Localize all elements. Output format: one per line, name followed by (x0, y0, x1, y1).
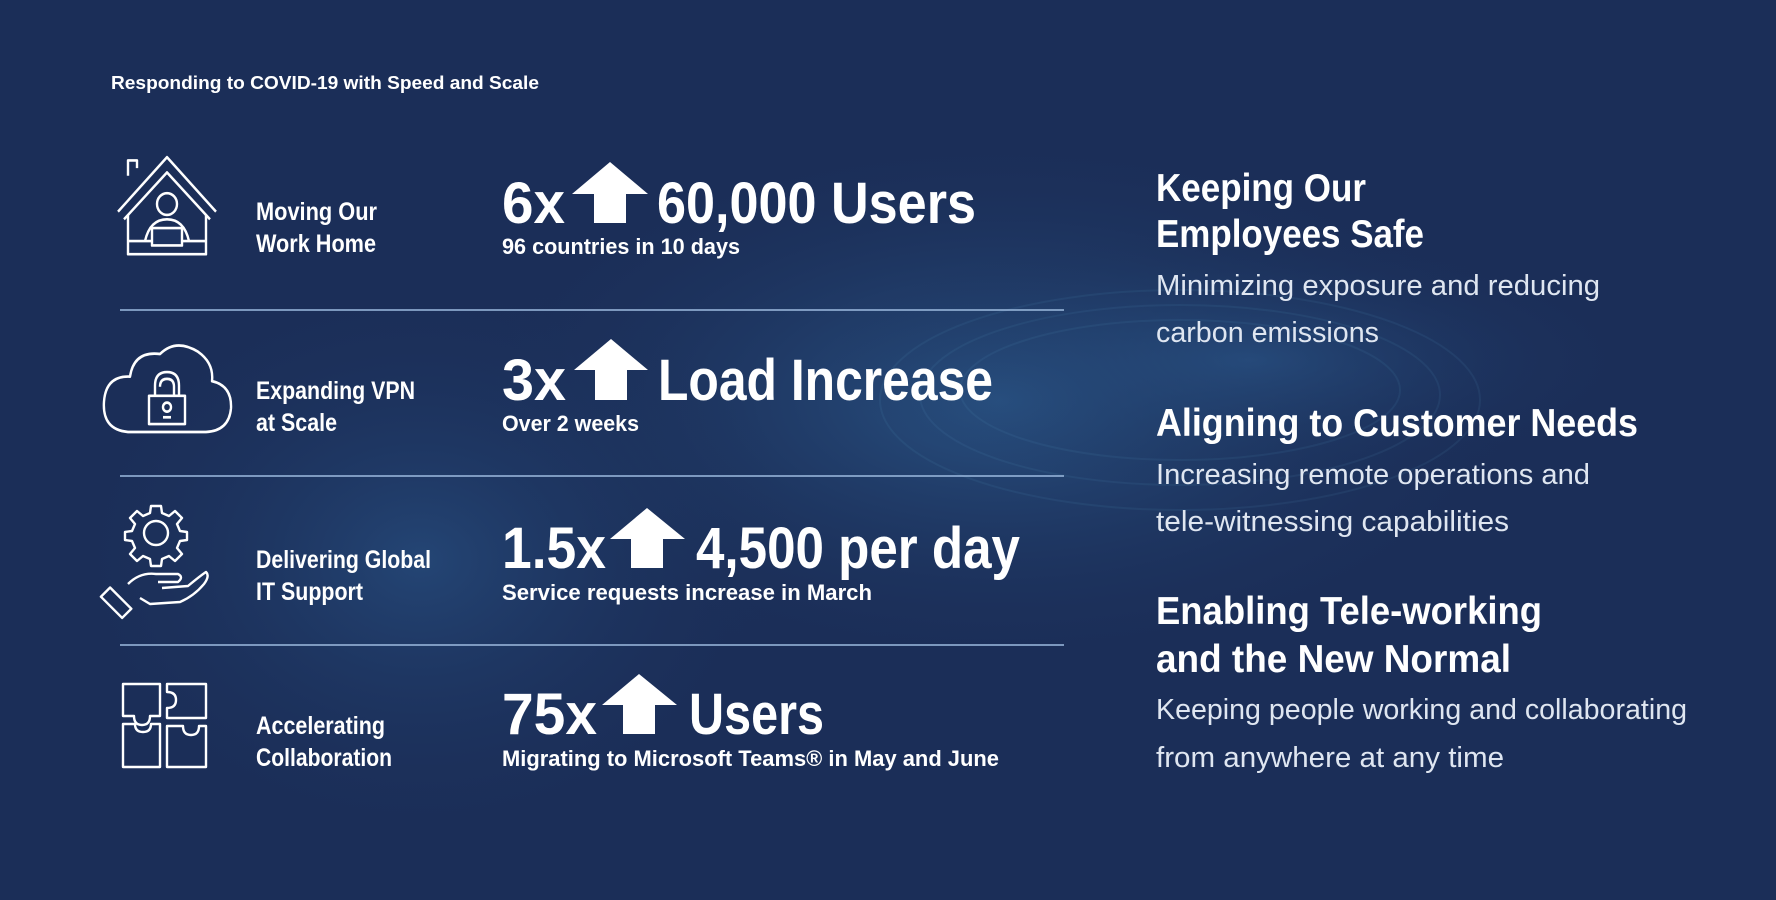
label: Delivering Global IT Support (256, 546, 431, 606)
stat: 6x 60,000 Users: 6x (502, 171, 565, 236)
stat: 1.5x 4,500 per day (502, 508, 1020, 605)
stat: 75x Users: Users (689, 682, 824, 747)
label: Expanding VPN at Scale: Expanding VPN (256, 377, 415, 405)
right: Aligning to Customer Needs: Increasing remote operations and (1156, 459, 1590, 491)
row 1: moving work home (118, 157, 976, 259)
label: Moving Our Work Home (256, 198, 377, 258)
right: Enabling Tele-working: and the New Normal (1156, 638, 1511, 681)
stat: 3x Load Increase: Load Increase (658, 348, 993, 413)
icon: house with person (118, 157, 216, 254)
right: Keeping Our Employees Safe: Keeping Our (1156, 167, 1366, 210)
row 2: expanding VPN (104, 339, 993, 437)
label: Accelerating Collaboration: Collaboration (256, 744, 392, 772)
label: Delivering Global IT Support: IT Support (256, 578, 364, 606)
right: Enabling Tele-working (1156, 590, 1687, 774)
right: Enabling Tele-working: from anywhere at any time (1156, 742, 1504, 774)
row 3: global IT support (101, 506, 1020, 618)
stat: 1.5x 4,500 per day: Service requests increase in March (502, 580, 872, 605)
right: Keeping Our Employees Safe: Employees Safe (1156, 213, 1424, 256)
stat: 6x 60,000 Users: 60,000 Users (657, 171, 976, 236)
stat: 75x Users: Migrating to Microsoft Teams® in May and June (502, 746, 999, 771)
stat: 1.5x 4,500 per day: 4,500 per day (696, 516, 1020, 581)
stat: 3x Load Increase: 3x (502, 348, 566, 413)
title: Responding to COVID-19 with Speed and Scale (111, 73, 539, 93)
stat: 1.5x 4,500 per day: 1.5x (502, 516, 606, 581)
right: Aligning to Customer Needs (1156, 402, 1638, 538)
stat: 75x Users: 75x (502, 682, 597, 747)
stat: 3x Load Increase: Over 2 weeks (502, 411, 639, 436)
icon: cloud with lock (104, 345, 231, 432)
icon: puzzle (123, 684, 206, 767)
stat: 75x Users (502, 674, 999, 771)
label: Expanding VPN at Scale: at Scale (256, 409, 337, 437)
label: Accelerating Collaboration: Accelerating (256, 712, 385, 740)
right: Keeping Our Employees Safe (1156, 167, 1600, 349)
right: Aligning to Customer Needs: tele-witnessing capabilities (1156, 506, 1509, 538)
right: Enabling Tele-working: Enabling Tele-working (1156, 590, 1542, 633)
row 4: accelerating collaboration (123, 674, 999, 772)
right: Keeping Our Employees Safe: carbon emissions (1156, 317, 1379, 349)
right: Aligning to Customer Needs: Aligning to Customer Needs (1156, 402, 1638, 445)
label: Moving Our Work Home: Work Home (256, 230, 376, 258)
icon: gear and hand (101, 506, 208, 618)
label: Moving Our Work Home: Moving Our (256, 198, 377, 226)
stat: 6x 60,000 Users: 96 countries in 10 days (502, 234, 740, 259)
label: Delivering Global IT Support: Delivering Global (256, 546, 431, 574)
stat: 3x Load Increase (502, 339, 993, 436)
right: Keeping Our Employees Safe: Minimizing exposure and reducing (1156, 270, 1600, 302)
label: Accelerating Collaboration (256, 712, 392, 772)
stat: 6x 60,000 Users (502, 162, 976, 259)
label: Expanding VPN at Scale (256, 377, 415, 437)
right: Enabling Tele-working: Keeping people working and collaborating (1156, 694, 1687, 726)
